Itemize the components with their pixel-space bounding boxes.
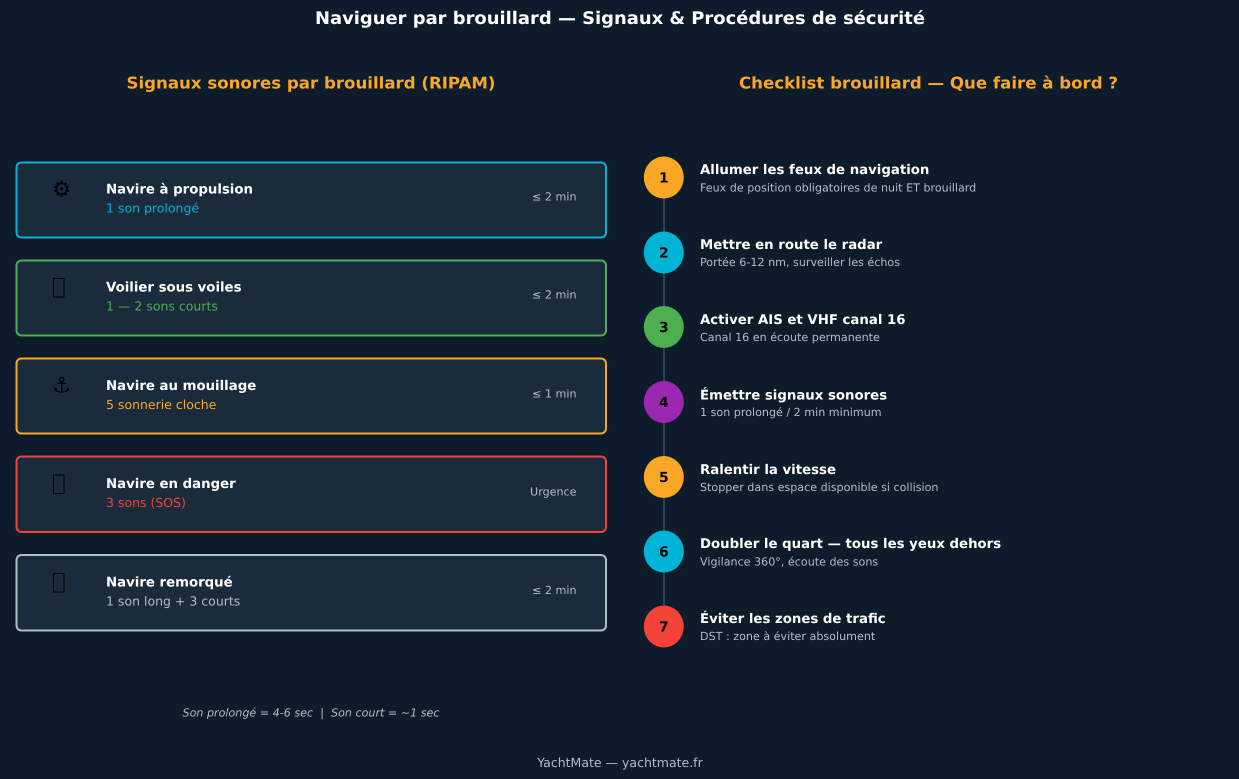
timeline checklist [644, 156, 1001, 648]
signal description: 1 — 2 sons courts [106, 298, 218, 314]
step 5 detail: Stopper dans espace disponible si collision [700, 481, 938, 494]
step 2 [644, 232, 900, 274]
card: anchored [16, 358, 606, 434]
step 6 detail: Vigilance 360°, écoute des sons [700, 556, 878, 568]
interval: ≤ 2 min [532, 584, 576, 597]
heading: sound signals: Signaux sonores par brouillard (RIPAM) [126, 74, 496, 92]
footer: YachtMate — yachtmate.fr [536, 755, 704, 770]
icon: missing glyph box [54, 278, 64, 297]
step 1 title: Allumer les feux de navigation [700, 163, 929, 178]
signal description: 3 sons (SOS) [106, 495, 186, 510]
step 4 [644, 381, 887, 423]
signal description: 1 son prolongé [106, 200, 199, 216]
step 3 [644, 306, 906, 348]
step 2 title: Mettre en route le radar [700, 238, 883, 253]
icon: gear: ⚙ [52, 178, 71, 202]
step 7 [644, 606, 886, 648]
signal description: 1 son long + 3 courts [106, 594, 240, 608]
interval: ≤ 2 min [532, 288, 576, 302]
step 4: 4 [659, 395, 669, 411]
step 6: 6 [659, 544, 669, 560]
step 6 title: Doubler le quart — tous les yeux dehors [700, 537, 1001, 552]
panel: sound signals [16, 162, 606, 630]
icon: anchor: ⚓ [52, 374, 71, 398]
note: sound definitions: Son prolongé = 4-6 sec | Son court = ~1 sec [183, 706, 439, 720]
step 7 detail: DST : zone à éviter absolument [700, 630, 876, 643]
card: danger [16, 456, 606, 532]
step 3 detail: Canal 16 en écoute permanente [700, 331, 880, 344]
step 3 title: Activer AIS et VHF canal 16 [700, 313, 906, 328]
heading: checklist: Checklist brouillard — Que faire à bord ? [739, 74, 1118, 92]
card: propulsion [16, 162, 606, 238]
step 1: 1 [659, 170, 669, 186]
signal name: Navire au mouillage [106, 379, 256, 394]
step 2 detail: Portée 6-12 nm, surveiller les échos [700, 256, 900, 269]
title: Naviguer par brouillard — Signaux & Procédures de sécurité [315, 9, 925, 29]
step 2: 2 [659, 246, 669, 262]
card: sailboat [16, 260, 606, 336]
interval: ≤ 2 min [532, 190, 576, 204]
step 5: 5 [659, 470, 669, 486]
signal name: Voilier sous voiles [106, 280, 242, 296]
signal name: Navire remorqué [106, 576, 233, 590]
card: towed [16, 555, 606, 630]
signal name: Navire à propulsion [106, 182, 253, 198]
interval: Urgence [530, 486, 577, 498]
timeline line [663, 177, 665, 626]
step 1 [644, 156, 976, 198]
icon: missing glyph box [54, 574, 64, 592]
signal description: 5 sonnerie cloche [106, 397, 217, 412]
step 5 [644, 456, 938, 498]
step 6 [644, 530, 1001, 572]
interval: ≤ 1 min [532, 388, 576, 400]
step 7 title: Éviter les zones de trafic [700, 610, 886, 627]
signal name: Navire en danger [106, 477, 236, 492]
step 3: 3 [659, 320, 669, 336]
step 4 title: Émettre signaux sonores [700, 386, 887, 404]
step 4 detail: 1 son prolongé / 2 min minimum [700, 406, 882, 419]
step 7: 7 [659, 620, 669, 636]
icon: missing glyph box [54, 475, 64, 494]
step 1 detail: Feux de position obligatoires de nuit ET brouillard [700, 182, 976, 194]
step 5 title: Ralentir la vitesse [700, 463, 836, 478]
